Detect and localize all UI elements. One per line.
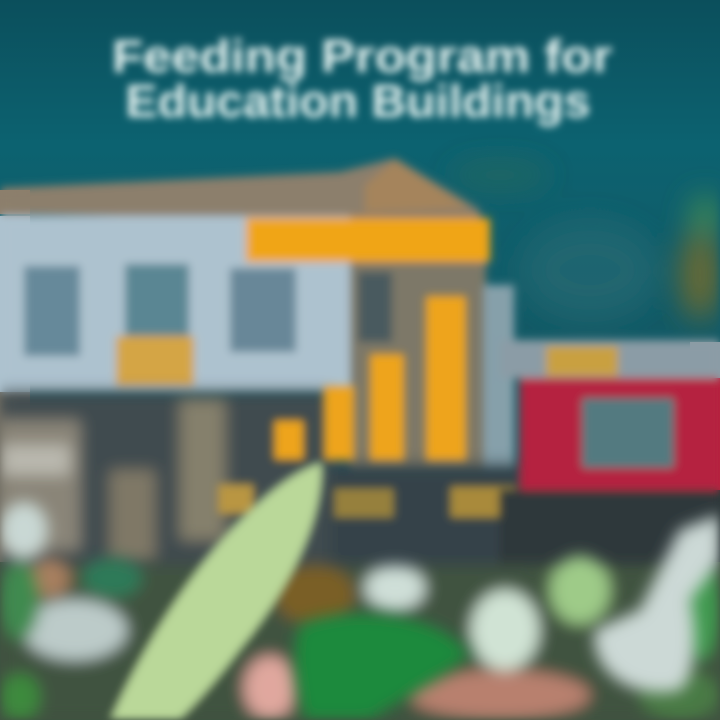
scene xyxy=(0,158,720,720)
banner xyxy=(246,218,490,262)
bar chart xyxy=(218,296,516,518)
green leaf xyxy=(295,614,470,720)
red building xyxy=(500,340,720,570)
bottom foliage and objects xyxy=(0,502,720,720)
roof xyxy=(0,158,480,222)
title xyxy=(112,30,612,127)
side tower xyxy=(350,258,514,470)
sky tint patches xyxy=(450,161,660,320)
windows xyxy=(24,264,296,356)
white vase xyxy=(595,515,720,692)
foliage right edge xyxy=(680,195,720,320)
main building xyxy=(0,158,514,470)
yellow panel on facade xyxy=(116,336,194,386)
title: Education Buildings xyxy=(126,75,590,127)
title: Feeding Program for xyxy=(112,30,612,82)
edge colour underlay xyxy=(0,190,720,720)
lower storey xyxy=(0,392,530,585)
green stalk xyxy=(110,462,322,720)
facade xyxy=(0,216,350,392)
